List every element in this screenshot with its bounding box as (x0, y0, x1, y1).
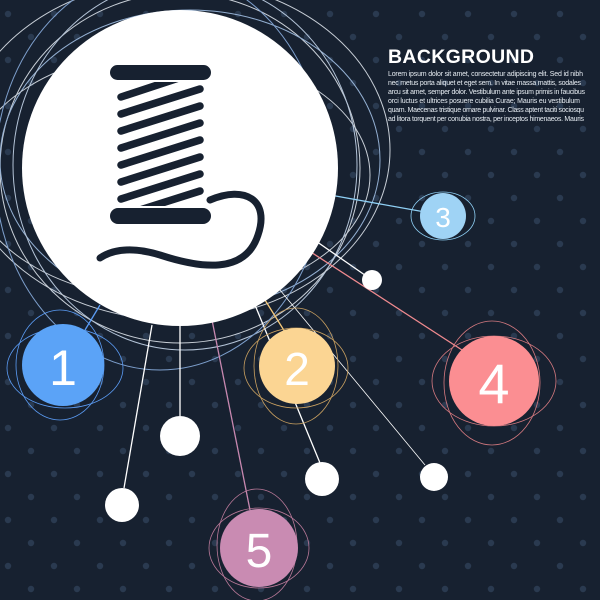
icon: thread spool (100, 65, 261, 265)
circle 2 (244, 308, 348, 424)
circle 1 (7, 310, 123, 420)
connector lines (85, 195, 462, 510)
white dots (105, 416, 448, 522)
white dot (362, 270, 382, 290)
title: BACKGROUND (388, 46, 534, 68)
body text (388, 71, 586, 123)
circle 4: 4 (478, 352, 510, 415)
body text: nec metus porta aliquet et eget sem. In vitae massa mattis, sodales (388, 80, 582, 87)
circle 3: 3 (435, 202, 451, 233)
body text: quam. Maecenas tristique ornare pulvinar. Class aptent taciti sociosqu (388, 107, 584, 114)
circle 2: 2 (284, 343, 310, 395)
circle 5 (209, 489, 309, 600)
body text: orci luctus et ultrices posuere cubilia Curae; Mauris eu vestibulum (388, 98, 580, 105)
body text: arcu sit amet, semper dolor. Vestibulum ante ipsum primis in faucibus (388, 89, 586, 96)
body text: Lorem ipsum dolor sit amet, consectetur adipiscing elit. Sed id nibh (388, 71, 583, 78)
circle 4 (432, 321, 556, 445)
circle 5: 5 (246, 525, 272, 578)
body text: ad litora torquent per conubia nostra, per inceptos himenaeos. Mauris (388, 116, 584, 123)
circle 1: 1 (49, 340, 77, 396)
circle 3 (411, 192, 475, 240)
main white circle with spool icon (22, 10, 338, 326)
